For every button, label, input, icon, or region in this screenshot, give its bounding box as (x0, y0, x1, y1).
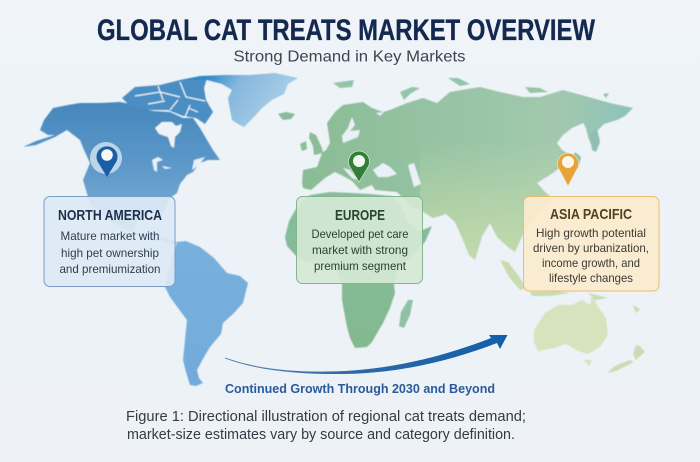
heading: Europe: EUROPE (335, 207, 385, 224)
map: Baltic Sea (342, 117, 360, 143)
map: Iceland (278, 112, 295, 120)
caption (126, 409, 526, 443)
icon: Europe pin (348, 151, 370, 182)
text: Asia Pacific description: driven by urbanization, (533, 242, 649, 255)
map: White Sea (376, 112, 384, 116)
map: Hudson Bay (155, 122, 182, 148)
text: North America description (60, 230, 160, 276)
map: South America (165, 241, 248, 386)
map: Caspian Sea (408, 163, 421, 187)
heading: North America: NORTH AMERICA (58, 207, 162, 224)
text: Europe description: market with strong (312, 244, 408, 257)
map: southern Asia tint (420, 160, 558, 260)
map: Japan and Sakhalin (568, 128, 600, 175)
map: Black Sea (373, 163, 397, 177)
arrow: growth (225, 335, 508, 374)
map: Madagascar (399, 300, 413, 328)
panel: North America (44, 196, 175, 286)
map: Africa (285, 192, 432, 348)
map: Great Lakes (152, 157, 205, 172)
text: Europe description: premium segment (314, 260, 407, 273)
map: Eurasia (302, 86, 634, 260)
subtitle: Strong Demand in Key Markets (234, 48, 466, 66)
map: Australia (534, 293, 608, 366)
panel: Asia Pacific (524, 196, 659, 291)
panel: Europe (296, 196, 422, 284)
map: New Zealand (607, 345, 645, 373)
map: Southeast Asia (500, 260, 640, 313)
text: Asia Pacific description (533, 227, 649, 285)
text: North America description: high pet ownership (61, 247, 159, 260)
text: growth label: Continued Growth Through 2030 and Beyond (225, 382, 495, 396)
heading: Asia Pacific: ASIA PACIFIC (550, 206, 632, 223)
text: North America description: Mature market with (60, 230, 160, 243)
map: Arctic islands (122, 78, 213, 124)
text: Europe description (312, 228, 408, 273)
icon: Asia Pacific pin (558, 153, 578, 186)
map: North America (23, 78, 220, 246)
text: North America description: and premiumization (60, 263, 160, 276)
caption: market-size estimates vary by source and category definition. (127, 427, 515, 443)
map: Greenland (180, 73, 298, 127)
map: Arctic Russia islands (333, 78, 609, 100)
map: Arctic channels (135, 82, 205, 117)
caption: Figure 1: Directional illustration of regional cat treats demand; (126, 409, 526, 425)
text: Europe description: Developed pet care (312, 228, 408, 241)
text: Asia Pacific description: lifestyle changes (549, 272, 633, 285)
icon: North America pin (90, 142, 122, 177)
text: Asia Pacific description: High growth potential (536, 227, 646, 240)
map: Adriatic (343, 168, 358, 180)
map: Britain (300, 132, 323, 155)
text: Asia Pacific description: income growth, and (542, 257, 640, 270)
world map (23, 73, 645, 386)
